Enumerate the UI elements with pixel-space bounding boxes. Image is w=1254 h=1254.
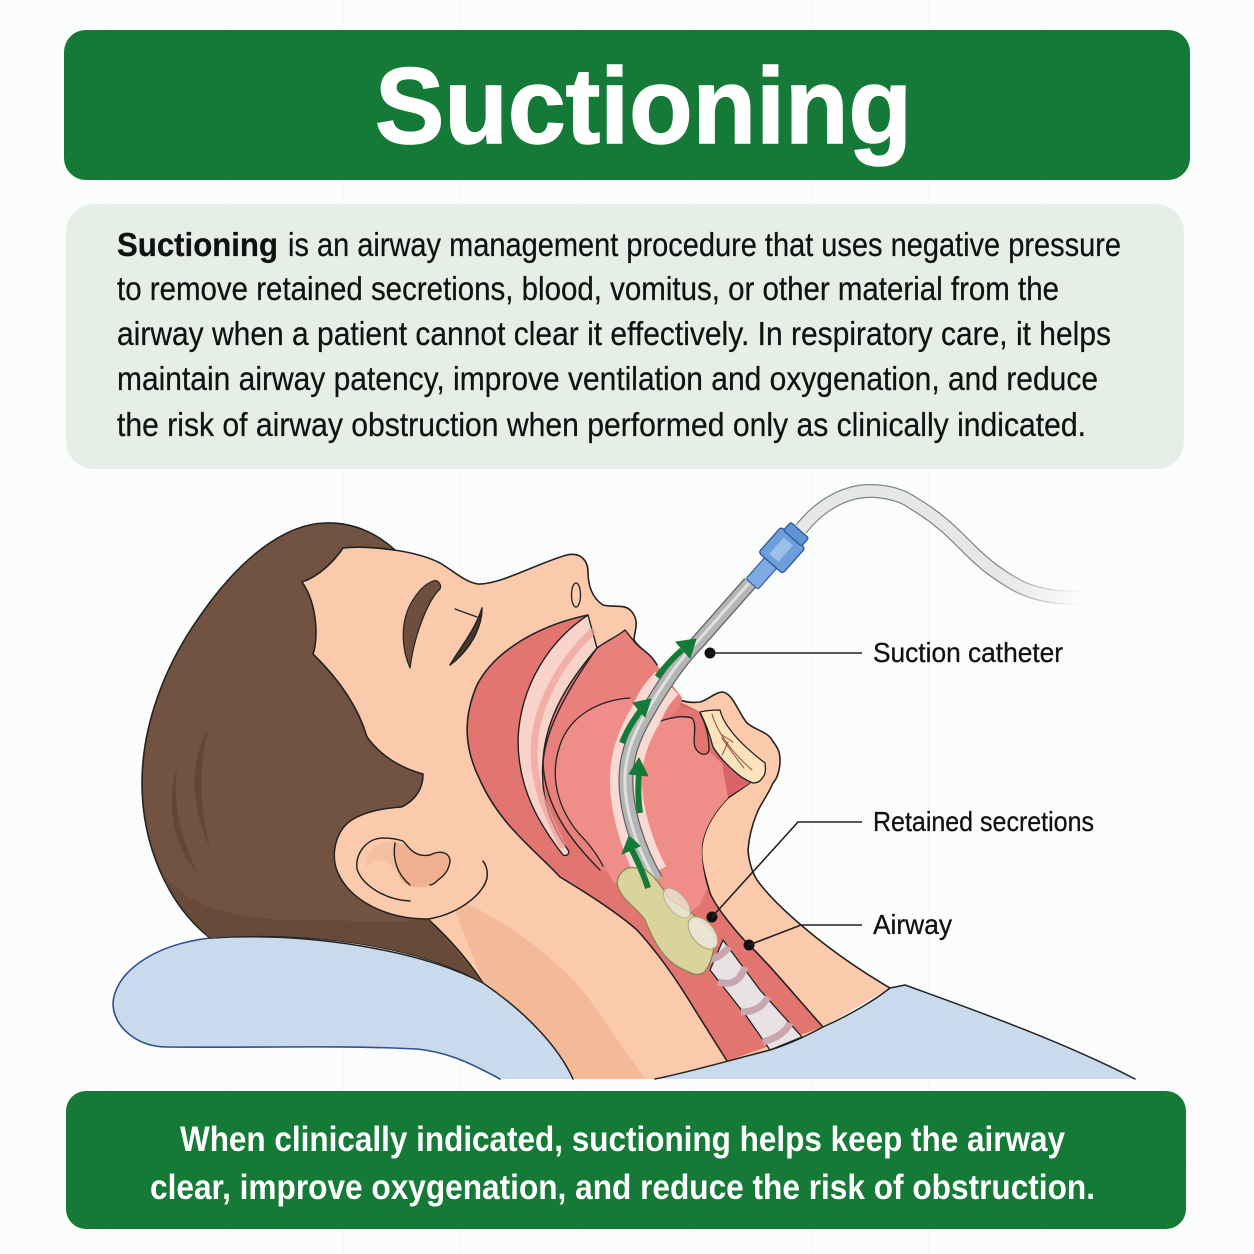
shirt: [655, 985, 1135, 1079]
tubing: [801, 491, 1082, 598]
teeth: [700, 710, 765, 783]
panel: definition text: is an airway management procedure that uses negative pressure: [288, 226, 1121, 263]
label: suction catheter: Suction catheter: [873, 637, 1063, 668]
ear: [334, 806, 487, 919]
label: retained secretions: Retained secretions: [873, 806, 1094, 837]
panel: definition text: [66, 204, 1184, 469]
label: airway: [744, 909, 952, 950]
arrows: suction flow: [622, 639, 696, 888]
crescent tissue: [518, 615, 597, 855]
illustration: patient airway cross-section: [113, 491, 1135, 1079]
eyebrow: [403, 581, 441, 668]
panel: definition text: airway when a patient cannot clear it effectively. In respiratory care, it helps: [117, 315, 1111, 352]
pillow: [113, 937, 573, 1079]
neck shadow: [450, 897, 645, 1079]
panel: definition text: the risk of airway obstruction when performed only as clinically indicated.: [117, 406, 1086, 443]
tongue and throat: [555, 698, 728, 925]
palate: [543, 630, 682, 880]
panel: definition text: maintain airway patency, improve ventilation and oxygenation, and reduce: [117, 360, 1098, 397]
label: airway: Airway: [873, 909, 952, 940]
mouth roof: [660, 698, 750, 797]
hair: [142, 523, 483, 983]
panel: definition text: Suctioning: [117, 226, 278, 263]
skin: face and neck: [280, 546, 890, 1079]
panel: definition text: to remove retained secretions, blood, vomitus, or other material from the: [117, 270, 1059, 307]
suction catheter: [625, 583, 750, 880]
label: retained secretions: [706, 806, 1094, 922]
nostril: [572, 583, 580, 607]
title banner: Suctioning: [375, 45, 912, 166]
pharynx wall: [467, 615, 823, 1061]
takeaway banner: clear, improve oxygenation, and reduce the risk of obstruction.: [150, 1168, 1095, 1207]
takeaway banner: [66, 1091, 1186, 1229]
title banner: [64, 30, 1190, 180]
trachea with rings: [708, 940, 802, 1050]
catheter halo: [626, 683, 667, 874]
secretions: [617, 868, 724, 974]
closed eye: [450, 608, 482, 665]
connector: [740, 519, 812, 595]
takeaway banner: When clinically indicated, suctioning helps keep the airway: [180, 1120, 1065, 1159]
label: suction catheter: [704, 637, 1063, 668]
